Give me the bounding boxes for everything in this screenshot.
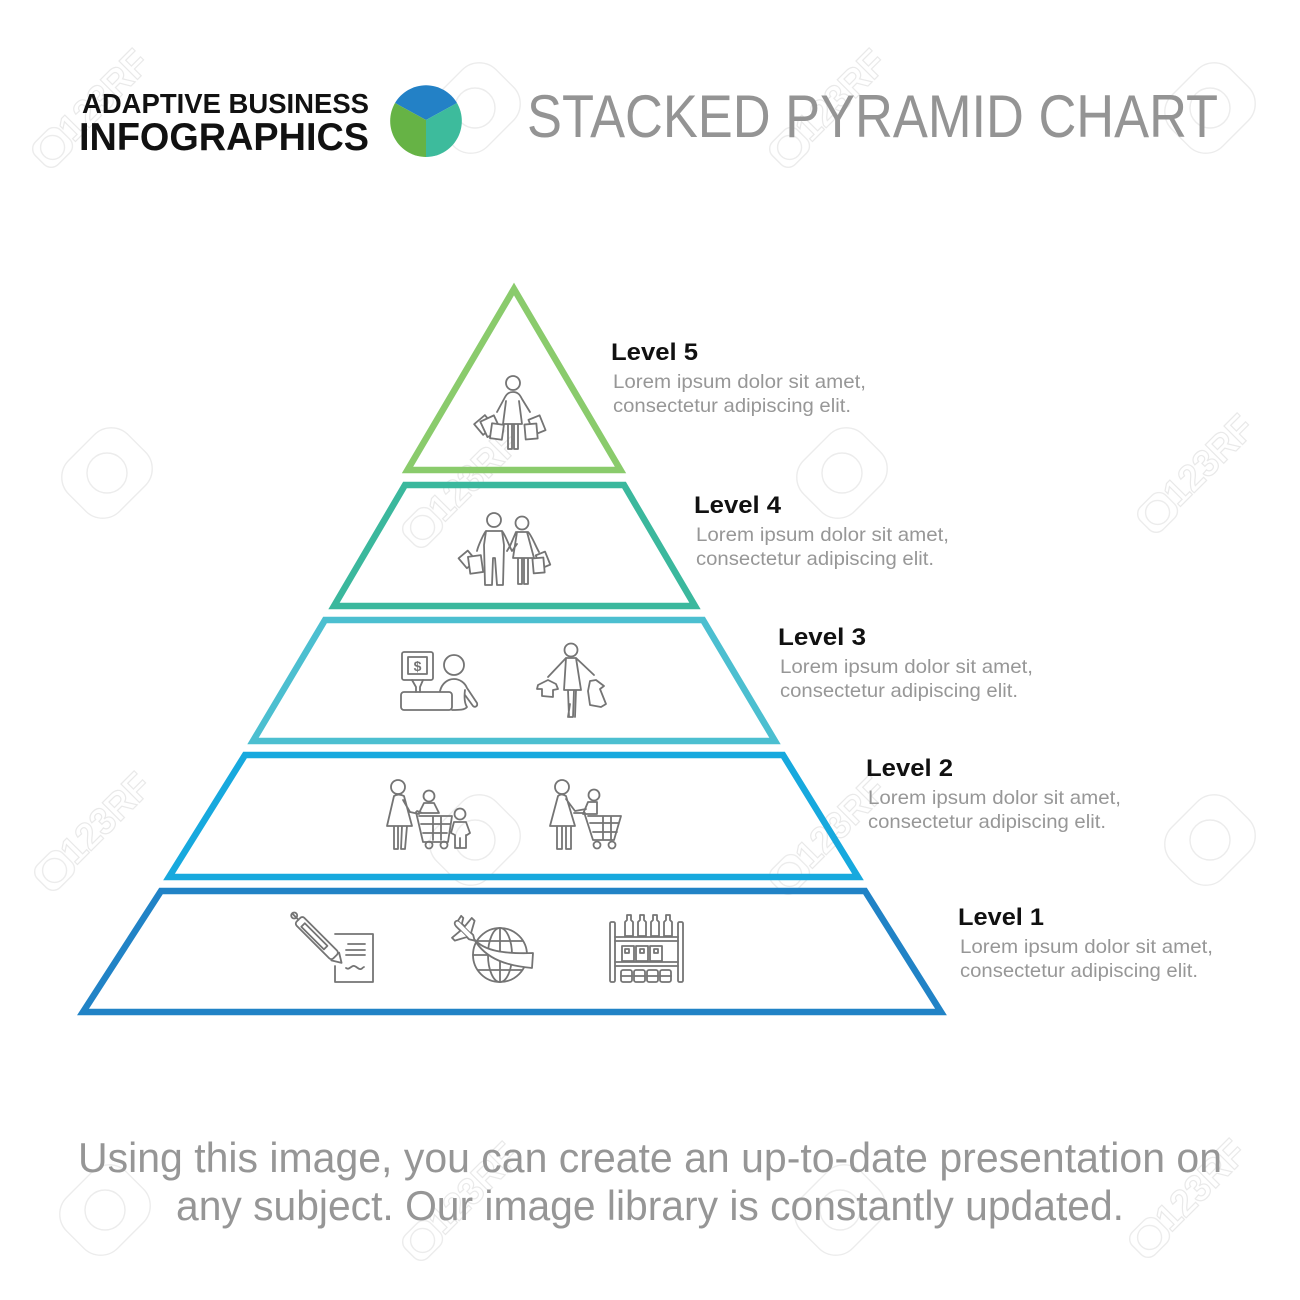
text: 123RF [1147, 1132, 1255, 1240]
text block: level 2: consectetur adipiscing elit. [868, 811, 1106, 833]
icon: woman with shopping bags [474, 376, 546, 449]
text block: level 3: Lorem ipsum dolor sit amet, [780, 656, 1033, 678]
text: 123RF [787, 769, 895, 877]
icon: woman and children with cart [387, 780, 470, 849]
pyramid level 5 [408, 289, 620, 470]
icon: cashier at checkout: $ [414, 658, 422, 674]
header logo: Adaptive Business Infographics [79, 85, 462, 159]
text block: level 1 [958, 904, 1213, 982]
icon: cashier at checkout [401, 652, 477, 710]
pyramid chart [83, 289, 941, 1012]
footer text: Using this image, you can create an up-to-date presentation on [78, 1134, 1222, 1181]
text block: level 3 [778, 624, 1033, 702]
text block: level 1: Level 1 [958, 904, 1044, 931]
text block: level 2: Level 2 [866, 755, 953, 782]
text: 123RF [787, 42, 895, 150]
text block: level 4 [694, 492, 949, 570]
icon: woman with child in cart [550, 780, 621, 849]
icon: store shelf [610, 915, 683, 982]
text block: level 5: Lorem ipsum dolor sit amet, [613, 371, 866, 393]
text block: level 5: Level 5 [611, 339, 698, 366]
text block: level 2 [866, 755, 1121, 833]
text block: level 1: Lorem ipsum dolor sit amet, [960, 936, 1213, 958]
text block: level 3: consectetur adipiscing elit. [780, 680, 1018, 702]
text block: level 2: Lorem ipsum dolor sit amet, [868, 787, 1121, 809]
text block: level 5 [611, 339, 866, 417]
text: 123RF [1155, 407, 1263, 515]
icon: airplane and globe [446, 912, 533, 982]
text block: level 3: Level 3 [778, 624, 866, 651]
footer text: any subject. Our image library is constantly updated. [176, 1182, 1124, 1229]
text block: level 4: Level 4 [694, 492, 782, 519]
logo text line 1: ADAPTIVE BUSINESS [82, 88, 369, 119]
text block: level 5: consectetur adipiscing elit. [613, 395, 851, 417]
text: 123RF [50, 42, 158, 150]
pyramid level 3 [253, 620, 775, 741]
text block: level 4: consectetur adipiscing elit. [696, 548, 934, 570]
pyramid level 4 [334, 485, 695, 606]
text: 123RF [52, 765, 160, 873]
icon: logo pie chart [390, 85, 462, 157]
text block: level 1: consectetur adipiscing elit. [960, 960, 1198, 982]
pyramid level 1 [83, 891, 941, 1012]
icon: pen signing document [288, 909, 373, 982]
text: 123RF [420, 1135, 528, 1243]
pyramid level 2 [169, 755, 858, 877]
icon: woman holding clothes [537, 644, 606, 717]
logo text line 2: INFOGRAPHICS [79, 116, 369, 159]
icon: couple with shopping bags [459, 513, 550, 585]
text block: level 4: Lorem ipsum dolor sit amet, [696, 524, 949, 546]
title: STACKED PYRAMID CHART [527, 83, 1218, 150]
text: 123RF [420, 422, 528, 530]
footer text [78, 1134, 1222, 1229]
